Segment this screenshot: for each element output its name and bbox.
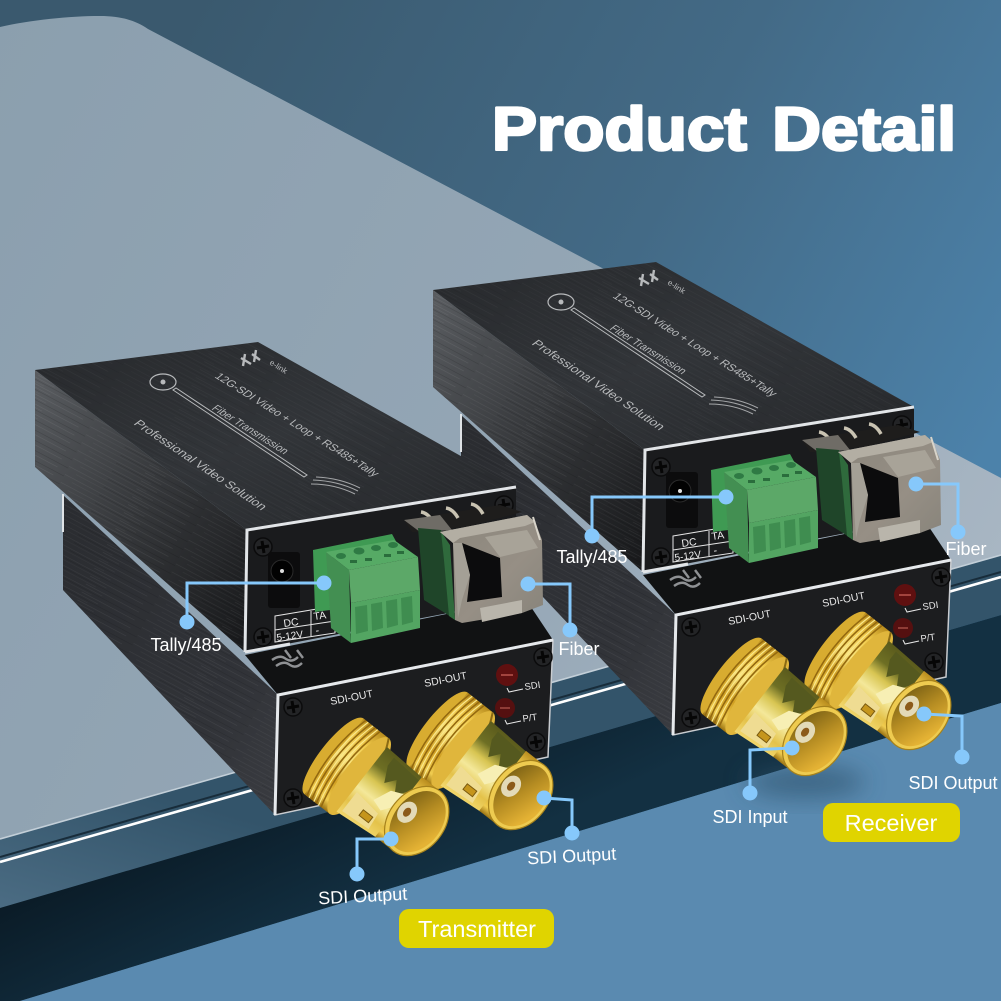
LED labels: P/T: [522, 712, 538, 725]
BNC connector rear: [795, 604, 970, 770]
DC jack: [268, 552, 300, 608]
SFP fiber port: [404, 504, 543, 623]
top face text: Professional Video Solution: [130, 417, 271, 512]
table edge white line: [0, 572, 1001, 862]
callouts: transmitter: [150, 576, 617, 908]
callout: tally transmitter: Tally/485: [150, 635, 222, 655]
top face text: [130, 371, 382, 512]
LED PT: [495, 698, 515, 718]
top face logo: e-link: [666, 278, 688, 296]
upper front panel: [643, 407, 914, 572]
top face text: Fiber Transmission: [209, 403, 291, 456]
callout: SDI input: SDI Input: [712, 807, 788, 827]
callout: SDI input: [712, 740, 800, 827]
lower unit side: [461, 414, 676, 735]
BNC connector front: [293, 710, 468, 876]
DC label table: TA: [711, 529, 725, 543]
top face text: Fiber Transmission: [607, 323, 689, 376]
table edge light line: [0, 555, 1001, 839]
callout: tally receiver: Tally/485: [556, 547, 628, 567]
connector shadow: [745, 766, 865, 798]
callouts: receiver: [556, 476, 998, 827]
upper panel frame: [245, 487, 516, 652]
lower desk surface: [20, 703, 1001, 1001]
lower panel frame: [275, 640, 553, 815]
LED SDI: [496, 664, 518, 686]
callout: fiber receiver: Fiber: [945, 539, 987, 559]
lower unit front panel: [673, 560, 951, 735]
top face text: 12G-SDI Video + Loop + RS485+Tally: [610, 291, 780, 399]
SFP fiber port: [802, 424, 941, 543]
LED labels: SDI: [922, 600, 939, 613]
dark shadow strip: [0, 615, 1001, 1001]
lower panel labels: SDI-OUT: [727, 608, 773, 628]
upper unit top: [35, 342, 516, 530]
screw: [254, 538, 272, 556]
LED labels: P/T: [920, 632, 936, 645]
upper unit side: [433, 290, 645, 572]
lower panel labels: [329, 670, 469, 708]
DC label table: 5-12V: [276, 629, 304, 644]
screw: [682, 709, 700, 727]
DC label table: -: [315, 625, 320, 637]
DC label table: 5-12V: [674, 549, 702, 564]
badge: transmitter: Transmitter: [418, 916, 536, 942]
badge: transmitter: [399, 909, 554, 948]
lower panel labels: SDI-OUT: [423, 670, 469, 690]
top face fiber line: [173, 388, 307, 477]
top face coax mark: [150, 374, 176, 390]
top face logo: [241, 350, 290, 376]
top face text: 12G-SDI Video + Loop + RS485+Tally: [212, 371, 382, 479]
badge: receiver: [823, 803, 960, 842]
callout: fiber receiver: [908, 476, 987, 559]
logo mark: [670, 570, 701, 587]
top face fiber line: [571, 308, 705, 397]
screw: [682, 618, 700, 636]
DC label table: TA: [313, 609, 327, 623]
screw: [932, 568, 950, 586]
LED labels: [505, 680, 541, 725]
upper panel frame: [643, 407, 914, 572]
callout: tally transmitter: [150, 576, 332, 655]
top face logo: [639, 270, 688, 296]
DC label table: [275, 606, 335, 644]
callout: SDI output receiver: SDI Output: [908, 773, 998, 793]
badge: receiver: Receiver: [845, 810, 938, 836]
top face coax mark: [548, 294, 574, 310]
top face swoosh: [311, 477, 360, 494]
table edge band: [0, 555, 1001, 908]
screw: [534, 648, 552, 666]
callout: SDI output rear: SDI Output: [527, 844, 617, 868]
LED PT: [893, 618, 913, 638]
logo mark: [272, 650, 303, 667]
screw: [925, 653, 943, 671]
lower unit top: [643, 518, 951, 615]
screw: [254, 628, 272, 646]
top face text: [528, 291, 780, 432]
screw: [652, 548, 670, 566]
DC label table: DC: [681, 536, 698, 550]
lower panel labels: SDI-OUT: [821, 590, 867, 610]
device: transmitter: [35, 342, 572, 876]
screw: [893, 416, 911, 434]
screw: [284, 789, 302, 807]
screw: [495, 496, 513, 514]
upper unit top: [433, 262, 914, 450]
DC jack: [666, 472, 698, 528]
title: Product Detail: [492, 95, 956, 163]
BNC connector rear: [397, 684, 572, 850]
screw: [527, 733, 545, 751]
LED labels: SDI: [524, 680, 541, 693]
BNC connector front: [691, 630, 866, 796]
terminal block: [711, 454, 818, 563]
callout: SDI output front: SDI Output: [318, 884, 408, 908]
LED SDI: [894, 584, 916, 606]
top face swoosh: [709, 397, 758, 414]
upper unit side: [35, 370, 247, 652]
lower unit front panel: [275, 640, 553, 815]
terminal block: [313, 534, 420, 643]
screw: [652, 458, 670, 476]
DC label table: -: [713, 545, 718, 557]
callout: fiber transmitter: Fiber: [558, 639, 600, 659]
callout: SDI output rear: [527, 790, 617, 868]
callout: SDI output front: [318, 832, 408, 908]
upper front panel: [245, 487, 516, 652]
DC label table: [673, 526, 733, 564]
screw: [284, 698, 302, 716]
callout: fiber transmitter: [520, 576, 600, 659]
lower panel labels: [727, 590, 867, 628]
lower panel frame: [673, 560, 951, 735]
DC label table: DC: [283, 616, 300, 630]
lower unit side: [63, 494, 278, 815]
callout: tally receiver: [556, 490, 734, 567]
callout: SDI output receiver: [908, 706, 998, 793]
top face logo: e-link: [268, 358, 290, 376]
device: receiver: [433, 262, 970, 796]
lower panel labels: SDI-OUT: [329, 688, 375, 708]
lower unit top: [245, 598, 553, 695]
LED labels: [903, 600, 939, 645]
top face text: Professional Video Solution: [528, 337, 669, 432]
